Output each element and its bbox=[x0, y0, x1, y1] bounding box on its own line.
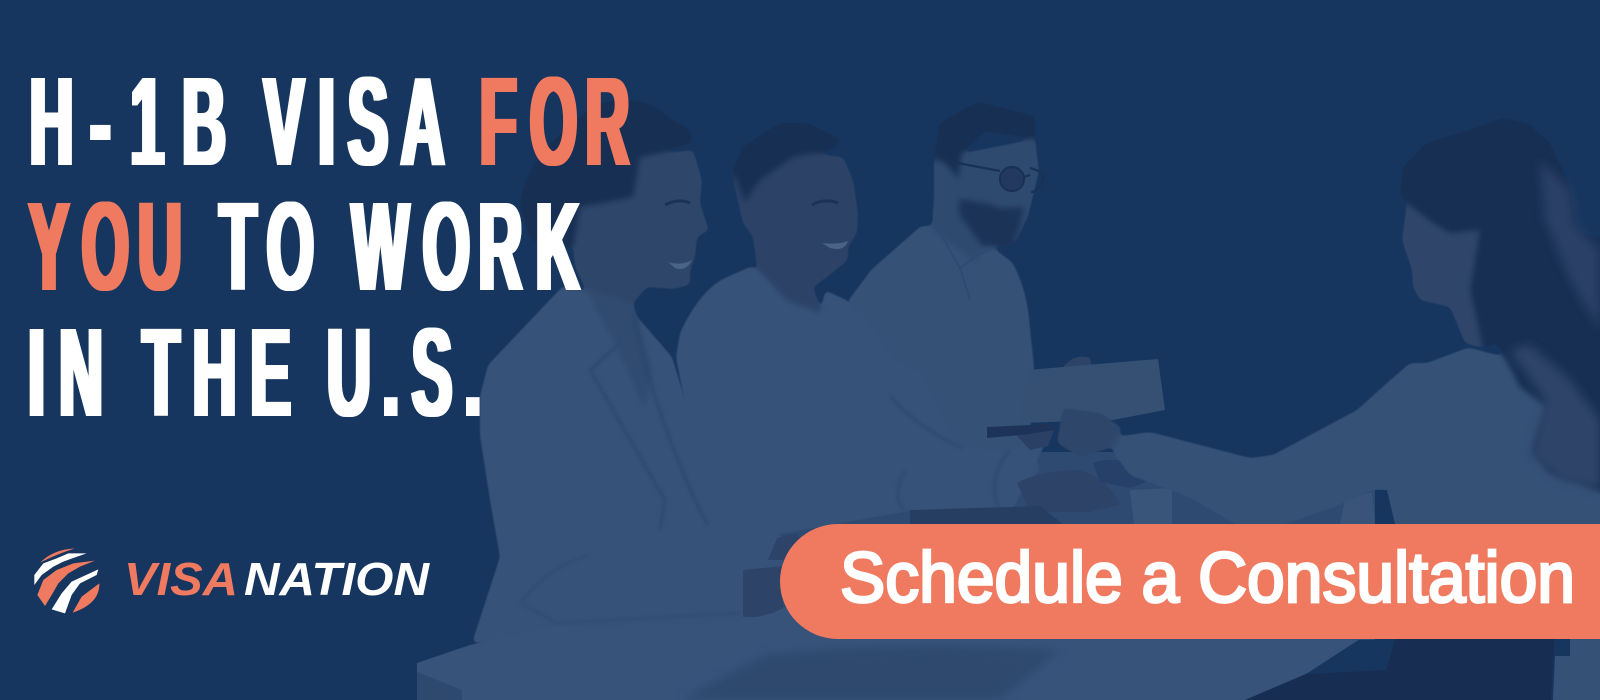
title line 2: TO WORK bbox=[192, 177, 579, 318]
button label: Schedule a Consultation bbox=[840, 539, 1575, 618]
wordmark: VISA: VISA bbox=[124, 553, 238, 605]
paper held between hands bbox=[987, 357, 1172, 524]
person: woman in blazer bbox=[472, 100, 783, 643]
shirt collar bbox=[936, 226, 993, 300]
hands on table bbox=[743, 460, 1157, 617]
title line 1: H-1B VISA bbox=[30, 52, 445, 193]
sweater folds and smile bbox=[812, 201, 1010, 510]
logo: VisaNation bbox=[34, 548, 430, 613]
wordmark: NATION: NATION bbox=[244, 553, 430, 605]
title line 1: FOR bbox=[480, 52, 629, 193]
hair highlights and chair bbox=[1340, 160, 1600, 524]
person: man in sweater bbox=[676, 123, 1047, 535]
table foreground bbox=[417, 600, 1600, 700]
person: man with glasses bbox=[848, 102, 1040, 511]
title line 3: IN THE U.S. bbox=[28, 303, 481, 444]
person: woman reaching across bbox=[1057, 118, 1600, 540]
call-to-action button bbox=[780, 524, 1600, 639]
glasses bbox=[947, 161, 1043, 192]
photo: four people at a table bbox=[417, 100, 1600, 700]
blazer lapels, sleeve and face details bbox=[520, 201, 740, 623]
title line 2: YOU bbox=[29, 177, 182, 318]
button shape bbox=[780, 524, 1600, 639]
table backdrop behind arms bbox=[700, 452, 1375, 640]
title bbox=[28, 52, 629, 444]
icon: striped globe bbox=[34, 548, 99, 613]
